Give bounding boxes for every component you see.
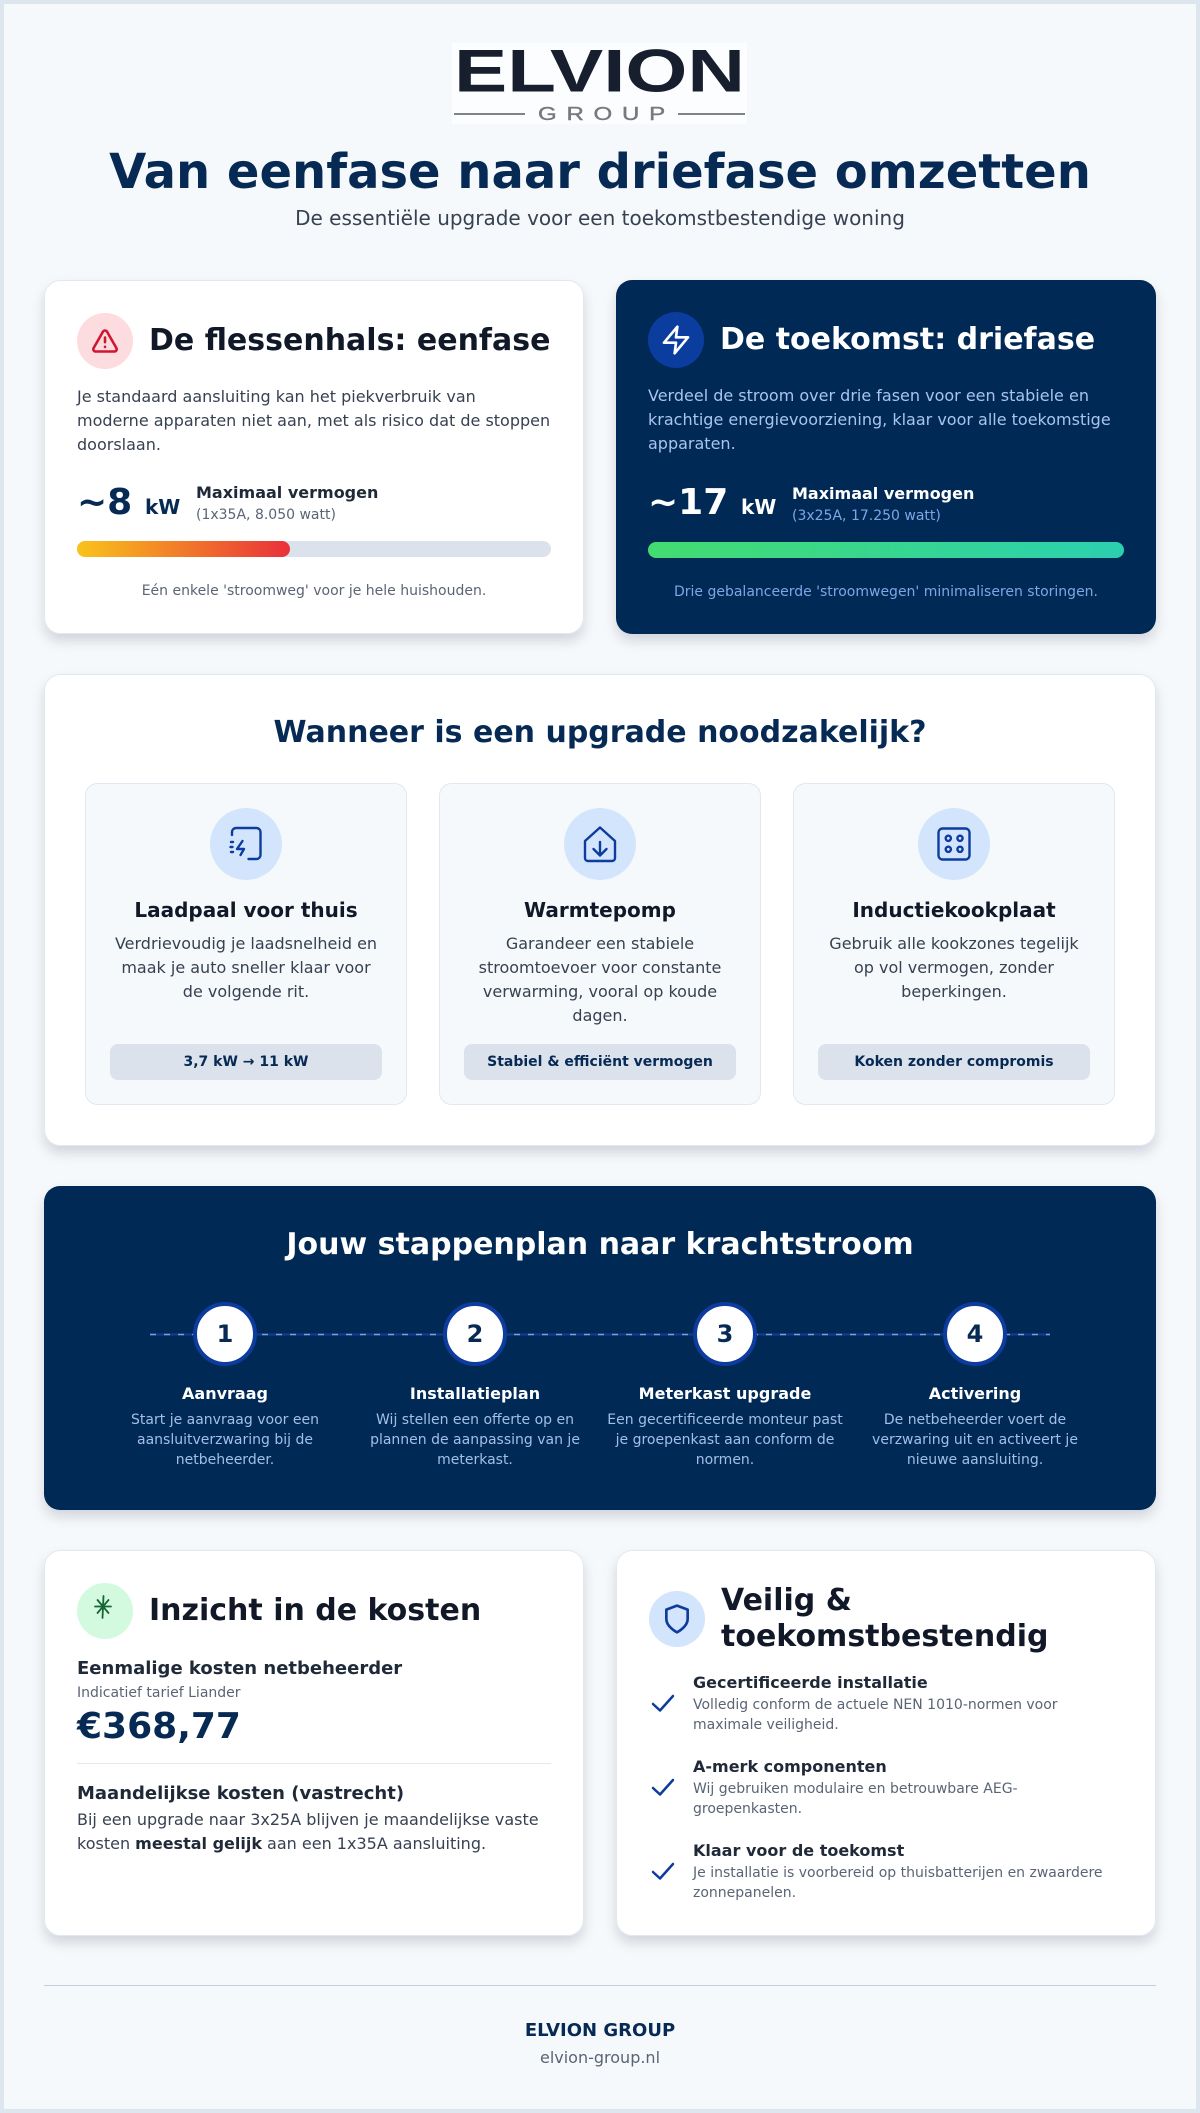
monthly cost: [77, 1783, 539, 1853]
bar: capacity: [648, 542, 1124, 558]
caption: Eén enkele 'stroomweg' voor je hele huishouden.: [142, 583, 486, 599]
one-off cost: Indicatief tarief Liander: [77, 1685, 241, 1701]
item 2: A-merk componenten: [693, 1757, 887, 1776]
text block: Verdeel de stroom over drie fasen voor een stabiele en: [648, 386, 1089, 405]
item 3: Je installatie is voorbereid op thuisbatterijen en zwaardere: [692, 1865, 1103, 1881]
footer: [525, 2020, 675, 2067]
heading: toekomstbestendig: [721, 1619, 1048, 1654]
item 1: Volledig conform de actuele NEN 1010-normen voor: [693, 1697, 1058, 1713]
card title: Inductiekookplaat: [852, 898, 1056, 922]
stat: 17 kW: Maximaal vermogen: [792, 484, 974, 503]
icon: house: [564, 808, 636, 880]
step 1: 1: [217, 1320, 233, 1348]
panel: driefase: [616, 280, 1156, 634]
step 3: [607, 1304, 843, 1468]
card: warmtepomp: [440, 784, 760, 1104]
stat: 8 kW: Maximaal vermogen: [196, 483, 378, 502]
monthly cost: Bij een upgrade naar 3x25A blijven je maandelijkse vaste: [77, 1810, 539, 1829]
heading: Inzicht in de kosten: [149, 1593, 481, 1628]
icon: warning: [77, 313, 133, 369]
icon: charger: [210, 808, 282, 880]
item 3: [653, 1841, 1103, 1901]
stat: 17 kW: ~17: [648, 482, 728, 523]
card text: verwarming, vooral op koude: [483, 982, 717, 1001]
icon: shield: [649, 1591, 705, 1647]
title: Van eenfase naar driefase omzetten: [109, 144, 1091, 200]
stat: 17 kW: kW: [741, 495, 776, 519]
step 4: [872, 1304, 1078, 1468]
footer: ELVION GROUP: [525, 2020, 675, 2041]
step 1: [131, 1304, 319, 1468]
stat: 17 kW: (3x25A, 17.250 watt): [792, 508, 941, 524]
pill: Koken zonder compromis: [854, 1054, 1054, 1070]
step 3: 3: [717, 1320, 733, 1348]
panel: wanneer: [44, 674, 1156, 1146]
icon: bolt: [648, 312, 704, 368]
caption: Drie gebalanceerde 'stroomwegen' minimaliseren storingen.: [674, 584, 1098, 600]
card text: Garandeer een stabiele: [506, 934, 694, 953]
step 1: aansluitverzwaring bij de: [137, 1432, 313, 1448]
stat: 8 kW: [77, 482, 378, 523]
card: laadpaal: [86, 784, 406, 1104]
step 4: verzwaring uit en activeert je: [872, 1432, 1078, 1448]
stat: 17 kW: [648, 482, 974, 524]
item 1: maximale veiligheid.: [693, 1717, 839, 1733]
heading: Jouw stappenplan naar krachtstroom: [284, 1227, 914, 1262]
step 4: Activering: [929, 1384, 1021, 1403]
item 2: [653, 1757, 1018, 1817]
icon: euro: [77, 1583, 133, 1639]
card title: Laadpaal voor thuis: [134, 898, 358, 922]
item 1: [653, 1673, 1058, 1733]
card text: dagen.: [572, 1006, 628, 1025]
pill: [464, 1044, 736, 1080]
step 2: Installatieplan: [410, 1384, 540, 1403]
step 2: Wij stellen een offerte op en: [376, 1412, 574, 1428]
subtitle: De essentiële upgrade voor een toekomstbestendige woning: [295, 206, 905, 230]
pill: [110, 1044, 382, 1080]
step 3: Een gecertificeerde monteur past: [607, 1412, 843, 1428]
monthly cost: Maandelijkse kosten (vastrecht): [77, 1783, 404, 1804]
card text: beperkingen.: [901, 982, 1007, 1001]
item 2: Wij gebruiken modulaire en betrouwbare AEG-: [693, 1781, 1018, 1797]
text block: apparaten.: [648, 434, 736, 453]
stat: 8 kW: ~8: [77, 482, 132, 523]
monthly cost: kosten: [77, 1834, 135, 1853]
monthly cost: meestal gelijk aan een 1x35A aansluiting.: [135, 1834, 486, 1853]
icon: cooktop: [918, 808, 990, 880]
step 1: Start je aanvraag voor een: [131, 1412, 319, 1428]
panel: eenfase: [44, 280, 584, 634]
pill: [818, 1044, 1090, 1080]
stat: 8 kW: (1x35A, 8.050 watt): [196, 507, 336, 523]
step 2: [370, 1304, 580, 1468]
step 2: 2: [467, 1320, 483, 1348]
card text: de volgende rit.: [183, 982, 309, 1001]
step 3: Meterkast upgrade: [639, 1384, 811, 1403]
panel: kosten: [44, 1550, 584, 1936]
step 4: De netbeheerder voert de: [884, 1412, 1066, 1428]
card: inductie: [794, 784, 1114, 1104]
card text: maak je auto sneller klaar voor: [121, 958, 371, 977]
text block: Je standaard aansluiting kan het piekverbruik van: [76, 387, 476, 406]
step 3: je groepenkast aan conform de: [615, 1432, 834, 1448]
logo: ELVION: [454, 38, 745, 104]
step 2: meterkast.: [437, 1452, 513, 1468]
logo: [452, 38, 747, 124]
heading: Veilig &: [721, 1583, 852, 1618]
heading: De toekomst: driefase: [720, 322, 1095, 357]
text block: krachtige energievoorziening, klaar voor alle toekomstige: [648, 410, 1111, 429]
heading: Wanneer is een upgrade noodzakelijk?: [273, 715, 927, 750]
logo: GROUP: [538, 104, 675, 124]
bar: capacity: [77, 541, 551, 557]
one-off cost: [76, 1658, 402, 1747]
card text: Verdrievoudig je laadsnelheid en: [115, 934, 377, 953]
item 2: groepenkasten.: [693, 1801, 802, 1817]
pill: 3,7 kW → 11 kW: [183, 1054, 309, 1070]
one-off cost: Eenmalige kosten netbeheerder: [77, 1658, 402, 1679]
step 2: plannen de aanpassing van je: [370, 1432, 580, 1448]
step 1: Aanvraag: [182, 1384, 268, 1403]
card text: op vol vermogen, zonder: [854, 958, 1054, 977]
timeline line: [150, 1334, 1050, 1336]
step 1: netbeheerder.: [176, 1452, 274, 1468]
text block: doorslaan.: [77, 435, 161, 454]
card title: Warmtepomp: [524, 898, 676, 922]
step 4: 4: [967, 1320, 983, 1348]
stat: 8 kW: kW: [145, 495, 180, 519]
footer: elvion-group.nl: [540, 2048, 660, 2067]
pill: Stabiel & efficiënt vermogen: [487, 1054, 713, 1070]
card text: Gebruik alle kookzones tegelijk: [829, 934, 1079, 953]
panel: veilig: [616, 1550, 1156, 1936]
step 3: normen.: [696, 1452, 754, 1468]
text block: moderne apparaten niet aan, met als risico dat de stoppen: [77, 411, 550, 430]
card text: stroomtoevoer voor constante: [479, 958, 721, 977]
step 4: nieuwe aansluiting.: [907, 1452, 1043, 1468]
panel: stappenplan: [44, 1186, 1156, 1510]
item 1: Gecertificeerde installatie: [693, 1673, 928, 1692]
heading: De flessenhals: eenfase: [149, 323, 550, 358]
item 3: Klaar voor de toekomst: [693, 1841, 905, 1860]
one-off cost: €368,77: [76, 1706, 241, 1747]
item 3: zonnepanelen.: [693, 1885, 796, 1901]
